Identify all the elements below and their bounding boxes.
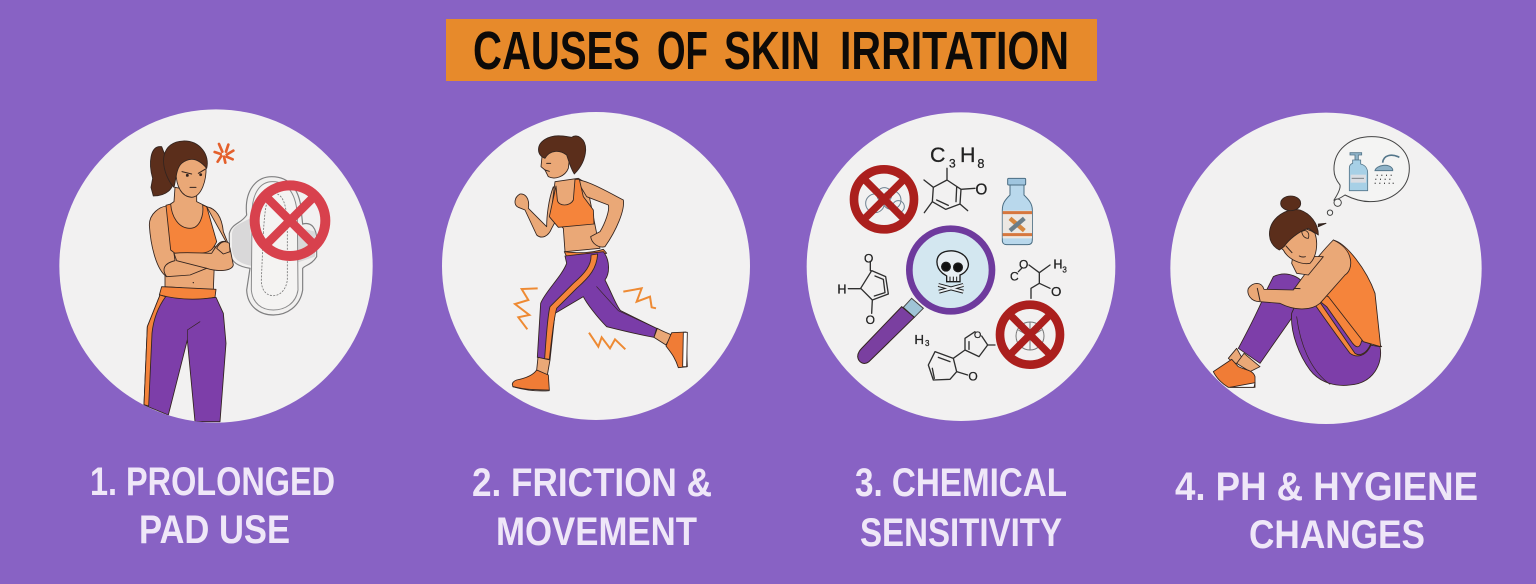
panel: pH and hygiene changes (1170, 113, 1482, 424)
label: prolonged pad use: PAD USE (139, 508, 290, 552)
icon: friction zigzags (515, 288, 656, 349)
label: friction and movement: MOVEMENT (496, 510, 697, 554)
label: chemical sensitivity: 3. CHEMICAL (855, 461, 1067, 505)
label: prolonged pad use: 1. PROLONGED (90, 460, 335, 504)
figure: running woman (512, 136, 687, 391)
title: OF (657, 21, 708, 81)
label: pH and hygiene changes: CHANGES (1249, 513, 1425, 557)
chemical formula: right chain: O (1051, 284, 1061, 299)
label: friction and movement (472, 461, 712, 554)
chemical formula: bottom ring: O (974, 330, 981, 340)
chemical formula: bottom ring: 3 (925, 339, 930, 348)
callout: thought bubble (1327, 137, 1409, 215)
chemical formula: left ring: O (866, 313, 875, 327)
title: IRRITATION (840, 21, 1069, 81)
chemical formula: C3H8 with ring: H (960, 143, 975, 167)
chemical formula: C3H8 with ring: 8 (977, 157, 984, 171)
panel: prolonged pad use (59, 109, 373, 423)
icon: prohibition sign (255, 185, 325, 256)
panel: chemical sensitivity (807, 112, 1115, 421)
label: friction and movement: 2. FRICTION & (472, 461, 712, 505)
chemical formula: C3H8 with ring: 3 (949, 156, 956, 170)
label: chemical sensitivity: SENSITIVITY (860, 511, 1062, 555)
icon: magnifying glass with skull (858, 229, 992, 363)
chemical formula: right chain: O (1019, 258, 1028, 272)
icon: prohibition sign top left (854, 169, 914, 229)
chemical formula: bottom ring: H (914, 332, 924, 347)
label: prolonged pad use (90, 460, 335, 552)
icon: skull and crossbones (937, 251, 968, 292)
chemical formula: left ring: O (864, 251, 873, 265)
panel: friction and movement (442, 112, 750, 420)
label: pH and hygiene changes: 4. PH & HYGIENE (1175, 465, 1478, 509)
icon: prohibition sign bottom right (1000, 305, 1060, 365)
icon: irritation burst (215, 144, 233, 163)
icon: soap bottle (1349, 153, 1368, 191)
chemical formula: left ring (837, 251, 888, 327)
label: chemical sensitivity (855, 461, 1067, 555)
icon: shower head (1375, 155, 1399, 183)
label: pH and hygiene changes (1175, 465, 1478, 557)
figure: sitting woman (1213, 196, 1382, 387)
icon: sanitary pad (229, 177, 317, 315)
figure: woman with crossed arms (144, 141, 233, 422)
title (446, 19, 1097, 81)
chemical formula: C3H8 with ring: O (975, 182, 987, 199)
title: SKIN (724, 21, 820, 81)
chemical formula: bottom ring: O (968, 370, 978, 384)
chemical formula: C3H8 with ring (924, 143, 987, 213)
chemical formula: left ring: H (837, 282, 846, 296)
chemical formula: right chain: H (1053, 258, 1062, 272)
chemical formula: bottom ring (914, 330, 995, 384)
chemical formula: right chain (1010, 258, 1067, 299)
chemical formula: right chain: 3 (1062, 266, 1067, 275)
chemical formula: right chain: C (1010, 270, 1019, 284)
chemical formula: C3H8 with ring: C (930, 143, 945, 167)
title: CAUSES (473, 21, 640, 81)
icon: chemical bottle (1002, 178, 1032, 245)
